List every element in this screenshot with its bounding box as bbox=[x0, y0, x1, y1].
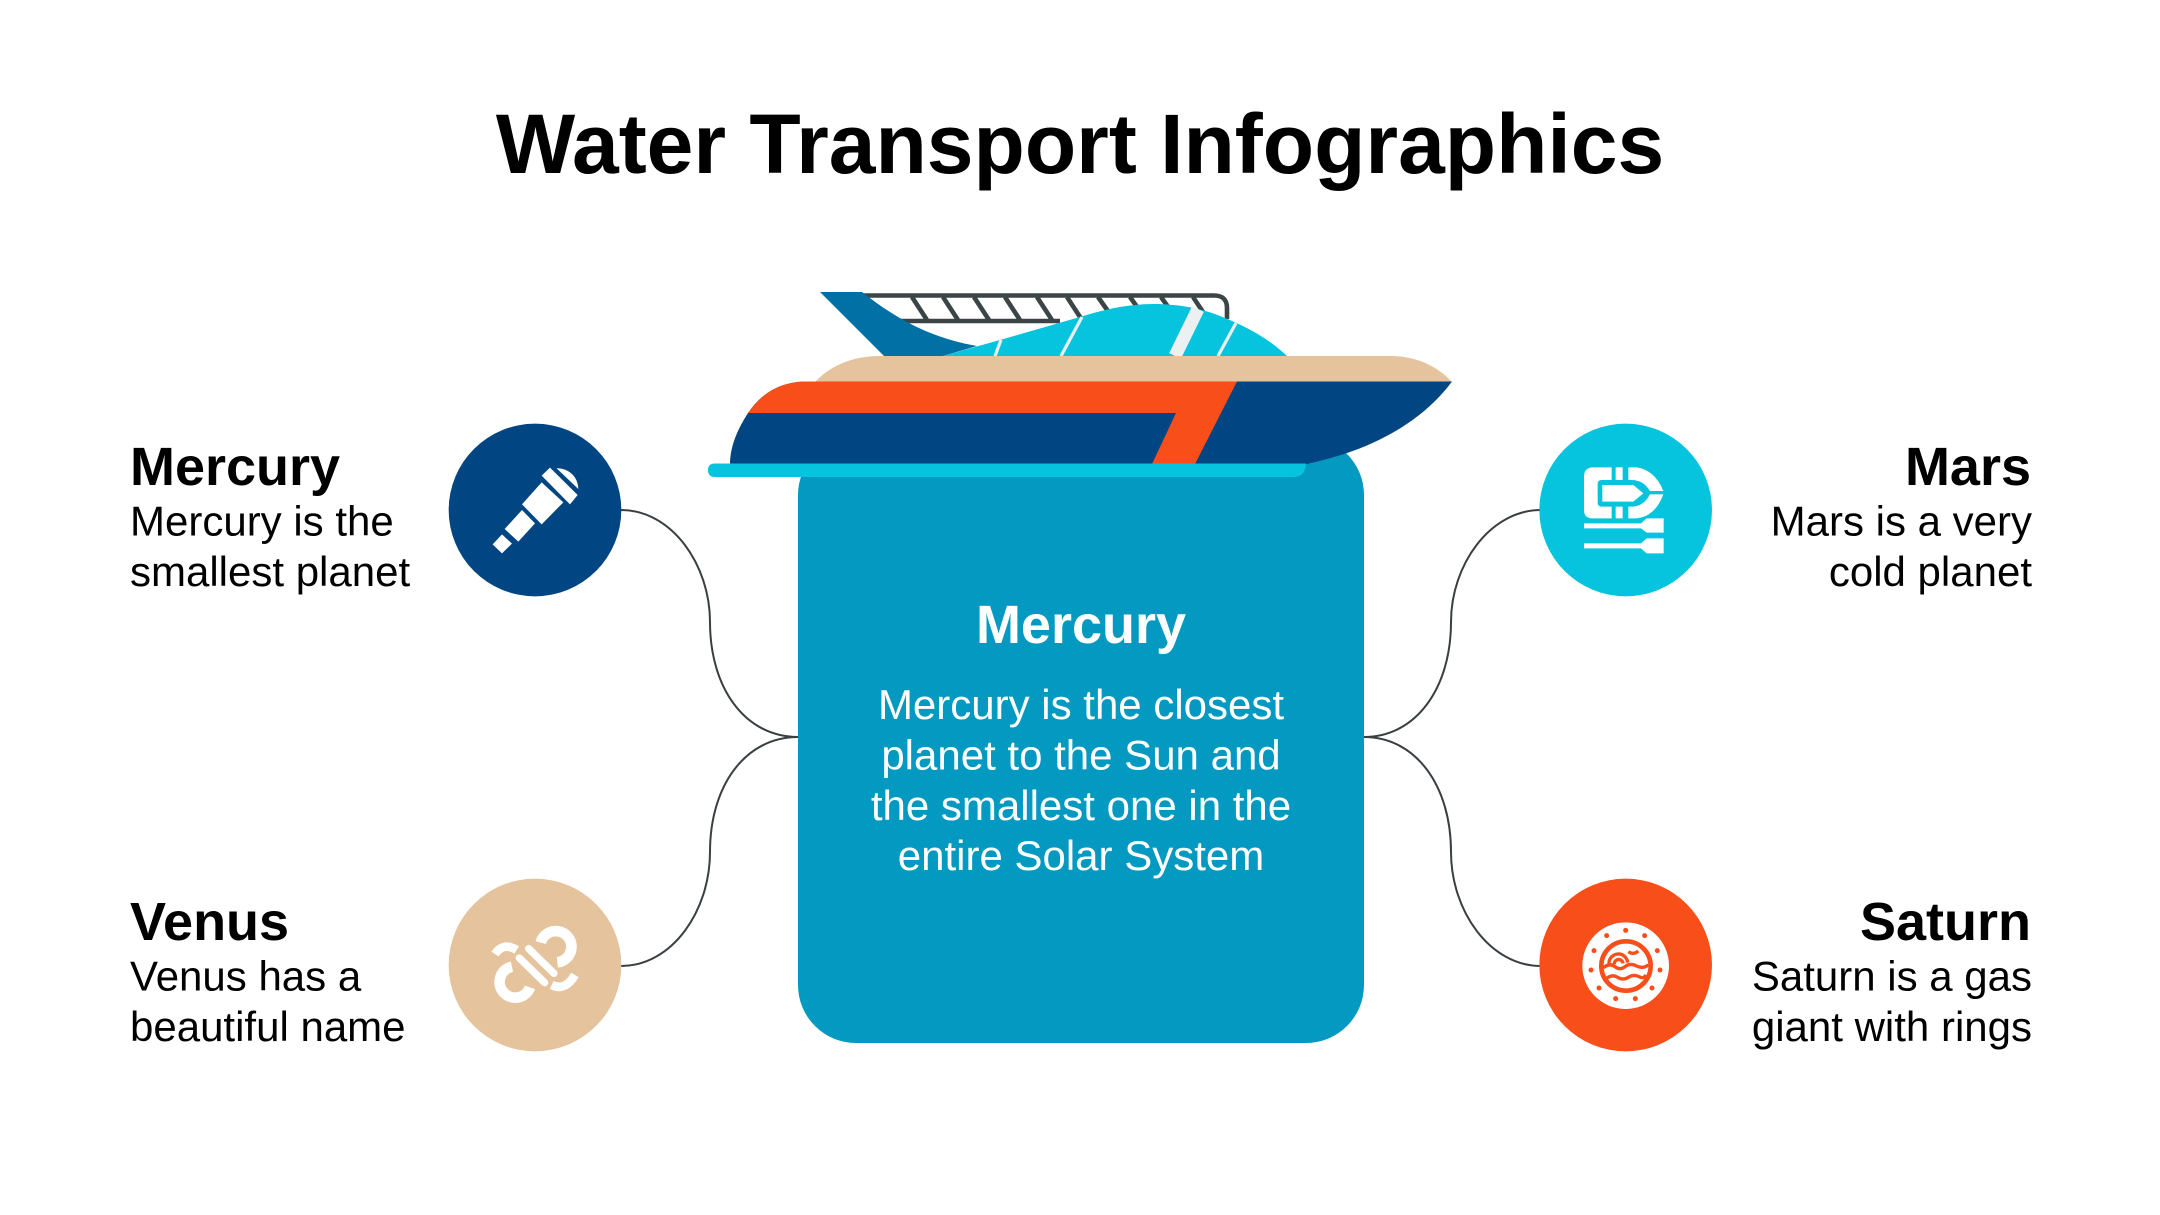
illustration: boat bbox=[708, 292, 1452, 477]
windshield stripes bbox=[995, 309, 1236, 356]
icon: dinghy on cyan circle bbox=[1539, 424, 1712, 596]
boat sail bbox=[820, 292, 977, 356]
icon: porthole on orange circle bbox=[1539, 879, 1712, 1051]
Mars text: Mars is a very bbox=[1771, 497, 2032, 544]
connector: Saturn to panel bbox=[1364, 737, 1541, 966]
panel text: entire Solar System bbox=[898, 832, 1264, 879]
panel text: Mercury is the closest bbox=[878, 681, 1284, 728]
Mercury text: Mercury is the bbox=[130, 497, 394, 544]
Mars text: cold planet bbox=[1829, 548, 2032, 595]
boat railing bbox=[850, 296, 1227, 321]
panel: center bbox=[798, 437, 1364, 1043]
item: Mercury bbox=[130, 424, 621, 596]
item: Venus bbox=[130, 879, 621, 1051]
boat deck bbox=[815, 356, 1452, 382]
boat windshield bbox=[943, 304, 1287, 356]
item: Saturn bbox=[1539, 879, 2032, 1051]
boat stripe bbox=[748, 382, 1237, 464]
Saturn text: giant with rings bbox=[1752, 1003, 2032, 1050]
connector: Venus to panel bbox=[621, 737, 798, 966]
icon: rope knot on tan circle bbox=[449, 879, 621, 1051]
Venus text: beautiful name bbox=[130, 1003, 406, 1050]
panel text: the smallest one in the bbox=[871, 782, 1291, 829]
connector: Mars to panel bbox=[1364, 510, 1541, 737]
Venus heading: Venus bbox=[130, 892, 289, 952]
Mars heading: Mars bbox=[1905, 437, 2031, 497]
icon: spyglass on navy circle bbox=[449, 424, 621, 596]
boat hull bbox=[730, 382, 1452, 464]
Saturn text: Saturn is a gas bbox=[1752, 952, 2032, 999]
Venus text: Venus has a bbox=[130, 952, 362, 999]
boat waterline bbox=[708, 464, 1306, 477]
connector: Mercury to panel bbox=[621, 510, 798, 737]
Mercury text: smallest planet bbox=[130, 548, 410, 595]
panel text: planet to the Sun and bbox=[881, 731, 1281, 778]
Mercury heading: Mercury bbox=[130, 437, 340, 497]
title: Water Transport Infographics bbox=[496, 97, 1664, 191]
Saturn heading: Saturn bbox=[1860, 892, 2031, 952]
item: Mars bbox=[1539, 424, 2032, 596]
panel heading: Mercury bbox=[976, 595, 1186, 655]
